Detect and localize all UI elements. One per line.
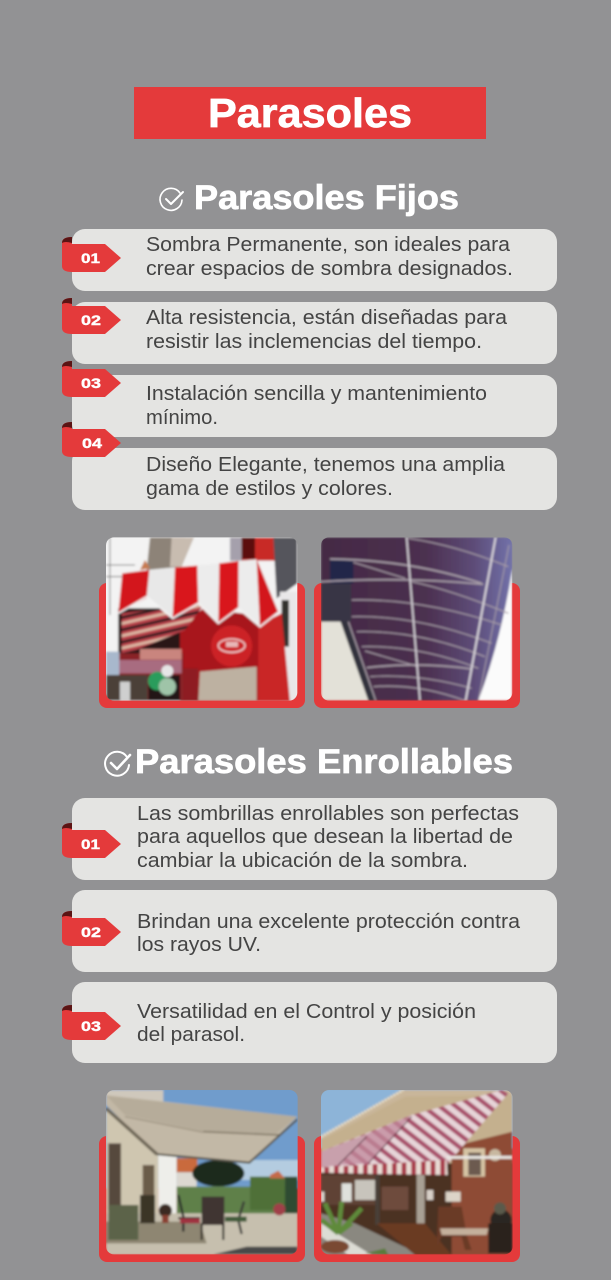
item 02 [62,890,557,972]
list: Parasoles Fijos [62,229,557,510]
item 02 [62,298,557,364]
item 04: 04 [82,435,102,451]
dark striped awning [122,603,205,656]
item 03: mínimo. [146,407,218,429]
item 01: crear espacios de sombra designados. [146,258,513,280]
item 02: Brindan una excelente protección contra [137,911,521,933]
title banner [134,87,486,139]
item 02: los rayos UV. [137,934,261,956]
item 04: Diseño Elegante, tenemos una amplia [146,454,506,476]
infographic: Parasoles [62,87,557,1262]
photo card: red striped awning on brick house [314,1088,520,1262]
item 02: Alta resistencia, están diseñadas para [146,307,508,329]
item 02: 02 [81,312,101,328]
photo card: fixed purple canopy [314,537,520,708]
photo card: beige retractable awning [99,1088,305,1262]
item 02: 02 [81,924,101,940]
item 01 [62,229,557,291]
lower red structure [178,608,261,701]
item 01: 01 [81,250,100,266]
item 01: Sombra Permanente, son ideales para [146,234,511,256]
item 03: 03 [81,375,101,391]
icon: check badge [160,188,183,210]
item 01: Las sombrillas enrollables son perfectas [137,803,519,825]
item 03: Versatilidad en el Control y posición [137,1001,476,1023]
striped roller awning [321,1090,508,1167]
heading: Parasoles Enrollables: Parasoles Enrollables [135,743,513,781]
item 03: 03 [81,1018,101,1034]
list: Parasoles Enrollables [62,798,557,1063]
item 01: cambiar la ubicación de la sombra. [137,850,468,872]
item 03: del parasol. [137,1024,245,1046]
item 03 [62,982,557,1063]
icon: check badge [105,752,130,776]
awning canopy [106,1095,297,1163]
item 01: para aquellos que desean la libertad de [137,826,513,848]
heading: Parasoles Fijos: Parasoles Fijos [194,179,459,217]
item 01: 01 [81,836,100,852]
striped valance [118,570,149,613]
item 03: Instalación sencilla y mantenimiento [146,383,487,405]
item 04 [62,422,557,510]
item 01 [62,798,557,880]
backing under awning [118,608,185,658]
photo card: fixed striped awning [99,535,305,708]
title banner: Parasoles [208,90,412,136]
item 02: resistir las inclemencias del tiempo. [146,331,482,353]
item 04: gama de estilos y colores. [146,478,393,500]
item 03 [62,361,557,437]
